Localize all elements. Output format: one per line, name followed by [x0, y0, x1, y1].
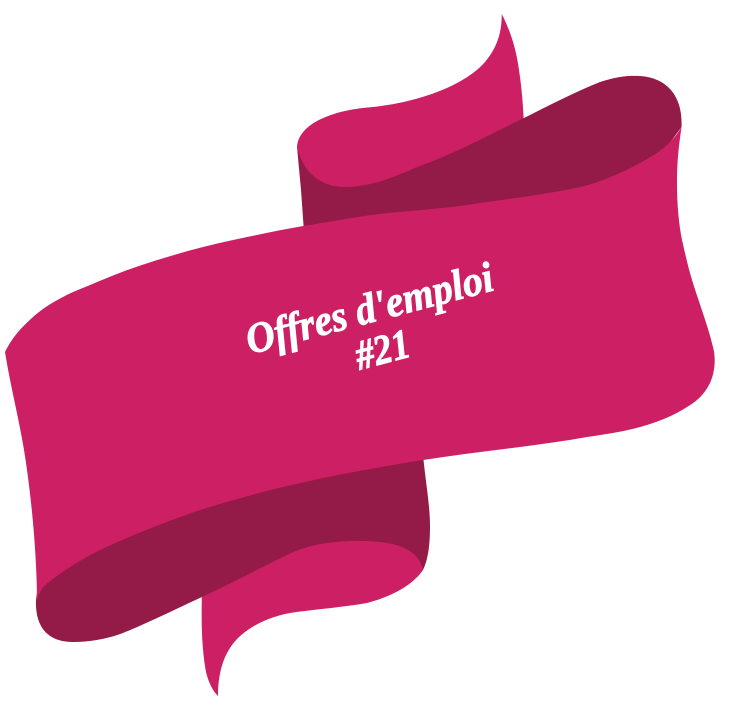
ribbon: bottom tail [202, 525, 423, 696]
ribbon: bottom inner fold [36, 455, 430, 642]
title line: #21: #21 [349, 321, 415, 380]
ribbon: top inner fold [297, 76, 682, 235]
title text [241, 254, 498, 380]
ribbon: top tail [297, 14, 524, 195]
ribbon: main band [5, 127, 715, 600]
title line: Offres d'emploi: Offres d'emploi [241, 254, 498, 364]
